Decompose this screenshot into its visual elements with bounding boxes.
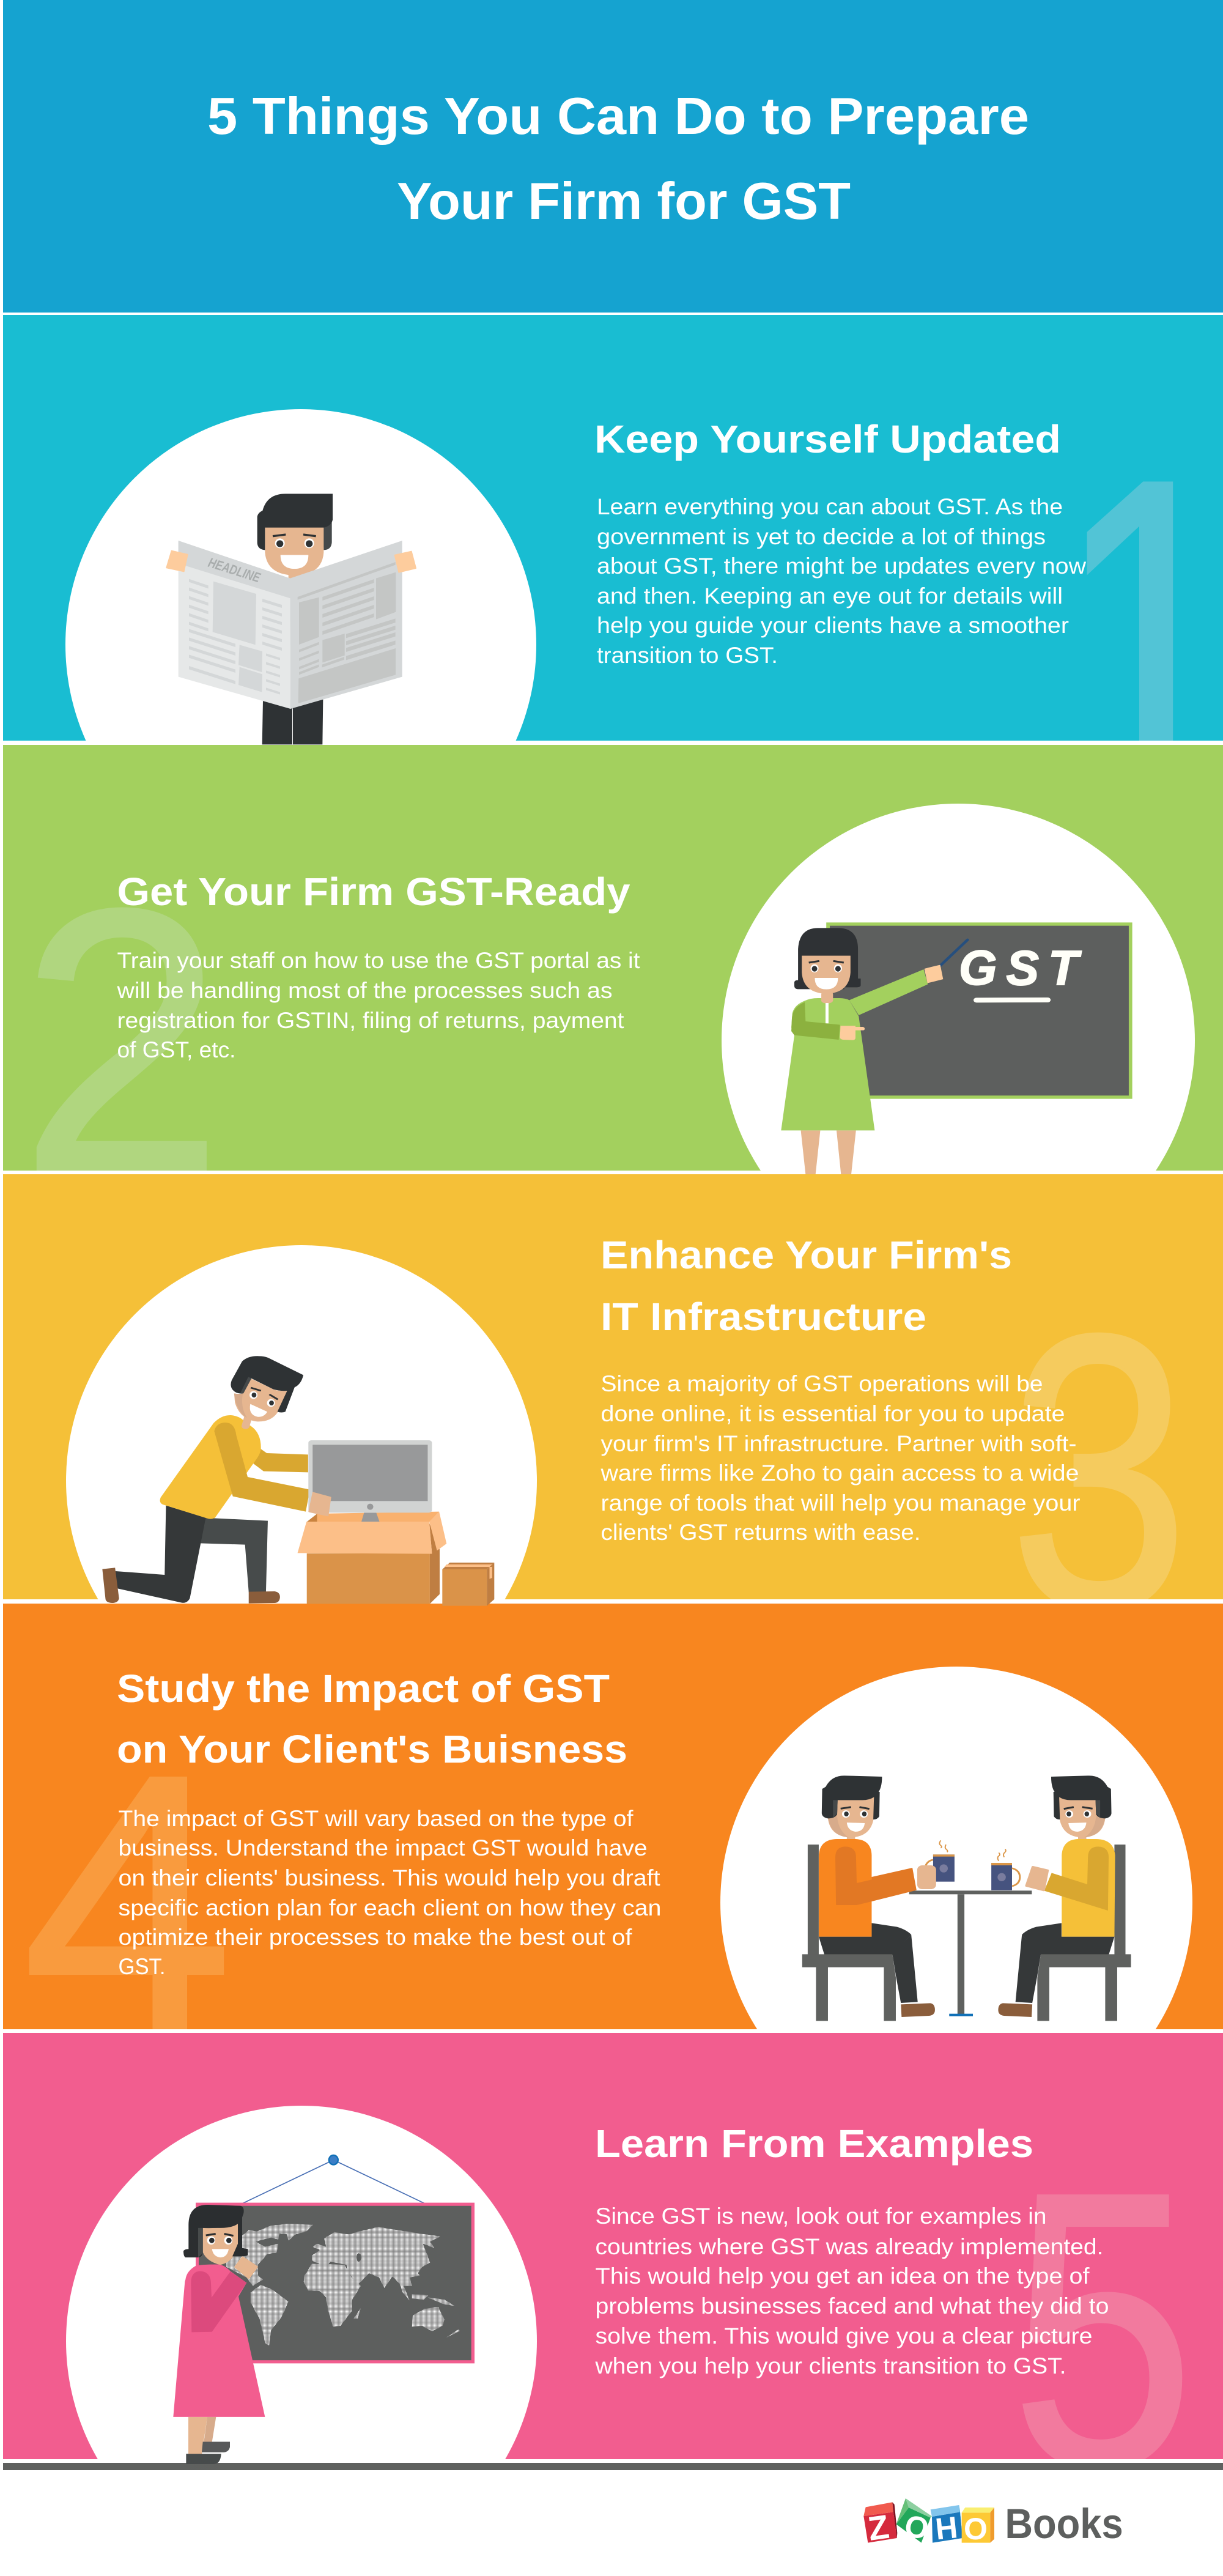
body text: on their clients' business. This would help you draft	[119, 1865, 660, 1890]
title	[207, 87, 1029, 231]
panel: enhance your firm's IT infrastructure	[3, 1174, 1223, 1606]
body text: when you help your clients transition to GST.	[594, 2353, 1066, 2378]
H cube: H	[934, 2510, 959, 2547]
white circle backdrop	[65, 409, 536, 741]
body text: GST.	[119, 1954, 165, 1979]
body text: clients' GST returns with ease.	[600, 1520, 921, 1545]
illustration: woman at world map	[173, 2155, 475, 2464]
body text: transition to GST.	[597, 643, 778, 668]
body text: problems businesses faced and what they did to	[596, 2293, 1109, 2319]
body text: business. Understand the impact GST would have	[119, 1835, 647, 1860]
body text	[600, 1371, 1080, 1545]
hand on monitor	[309, 1493, 330, 1516]
hanging world map	[196, 2155, 475, 2363]
left man body	[802, 1775, 935, 2021]
open cardboard box	[298, 1512, 446, 1604]
blackboard	[826, 922, 1132, 1099]
numeral 3: 3	[1009, 1253, 1189, 1690]
body text: ware firms like Zoho to gain access to a wide	[600, 1460, 1079, 1486]
body text: specific action plan for each client on how they can	[119, 1895, 662, 1920]
body text: will be handling most of the processes such as	[116, 978, 612, 1003]
heading: Enhance Your Firm's	[600, 1233, 1012, 1277]
body text: This would help you get an idea on the type of	[596, 2263, 1090, 2289]
heading	[600, 1233, 1012, 1339]
right man body (mirrored)	[998, 1775, 1131, 2021]
illustration: man reading newspaper	[166, 494, 416, 744]
white circle backdrop	[66, 2106, 537, 2459]
panel: study the impact of GST	[3, 1604, 1223, 2029]
panel: get your firm GST-ready	[3, 745, 1223, 1174]
heading: Get Your Firm GST-Ready	[117, 870, 630, 914]
body text: Since GST is new, look out for examples in	[596, 2204, 1047, 2229]
body text: Learn everything you can about GST. As the	[597, 494, 1063, 519]
O cube yellow: O	[964, 2512, 988, 2546]
header banner	[3, 0, 1223, 313]
title: 5 Things You Can Do to Prepare	[207, 87, 1029, 146]
illustration: teacher at GST blackboard	[781, 922, 1132, 1174]
body text: about GST, there might be updates every now	[597, 553, 1086, 579]
Z cube: Z	[866, 2508, 892, 2548]
body text: solve them. This would give you a clear picture	[596, 2323, 1092, 2348]
body text: countries where GST was already implemented.	[596, 2234, 1103, 2259]
white circle backdrop	[720, 1667, 1192, 2029]
white circle backdrop	[66, 1245, 537, 1599]
body text: Since a majority of GST operations will be	[600, 1371, 1043, 1396]
numeral 2: 2	[20, 831, 224, 1250]
body text: help you guide your clients have a smoother	[597, 613, 1069, 638]
woman figure	[173, 2205, 265, 2464]
illustration: two men at a coffee table	[802, 1775, 1131, 2021]
man	[102, 1356, 310, 1604]
body text: optimize their processes to make the best out of	[119, 1925, 632, 1950]
wordmark: Books	[1005, 2500, 1123, 2547]
title: Your Firm for GST	[397, 172, 851, 231]
body text	[116, 948, 640, 1062]
left torso and arm	[819, 1839, 955, 1937]
body text: The impact of GST will vary based on the type of	[119, 1806, 634, 1831]
body text: government is yet to decide a lot of things	[597, 524, 1046, 549]
body text: registration for GSTIN, filing of returns, payment	[117, 1008, 624, 1033]
illustration: man reading newspaper: HEADLINE	[206, 555, 263, 585]
Z cube	[863, 2502, 897, 2548]
heading: Keep Yourself Updated	[594, 417, 1061, 461]
right torso and arm	[991, 1839, 1115, 1937]
body text	[597, 494, 1086, 668]
heading: Study the Impact of GST	[117, 1667, 610, 1711]
table	[909, 1890, 1032, 2016]
heading: IT Infrastructure	[600, 1295, 926, 1339]
O cube green: O	[901, 2508, 932, 2547]
body text: Train your staff on how to use the GST portal as it	[117, 948, 640, 973]
body text: your firm's IT infrastructure. Partner with soft-	[600, 1431, 1076, 1456]
footer bar	[3, 2463, 1223, 2470]
heading: on Your Client's Buisness	[117, 1727, 627, 1771]
logo: Zoho Books	[863, 2498, 1123, 2548]
body text: of GST, etc.	[117, 1037, 236, 1062]
O cube yellow	[962, 2508, 994, 2546]
body text: and then. Keeping an eye out for details will	[597, 583, 1063, 609]
teacher figure	[781, 928, 942, 1174]
white circle backdrop	[722, 804, 1195, 1171]
heading	[117, 1667, 627, 1771]
heading: Learn From Examples	[595, 2122, 1033, 2166]
O cube green	[896, 2498, 932, 2547]
numeral 5: 5	[1011, 2111, 1195, 2548]
body text: range of tools that will help you manage your	[600, 1490, 1080, 1516]
computer monitor	[308, 1440, 439, 1522]
body text	[594, 2204, 1109, 2378]
small parcel	[442, 1563, 494, 1606]
illustration: man unpacking a computer	[102, 1356, 494, 1606]
chalk word GST: GST	[959, 941, 1082, 995]
body text	[119, 1806, 662, 1979]
numeral 4: 4	[22, 1699, 234, 2109]
body text: done online, it is essential for you to update	[600, 1401, 1065, 1426]
panel: learn from examples	[3, 2033, 1223, 2464]
panel: keep yourself updated	[3, 315, 1223, 745]
